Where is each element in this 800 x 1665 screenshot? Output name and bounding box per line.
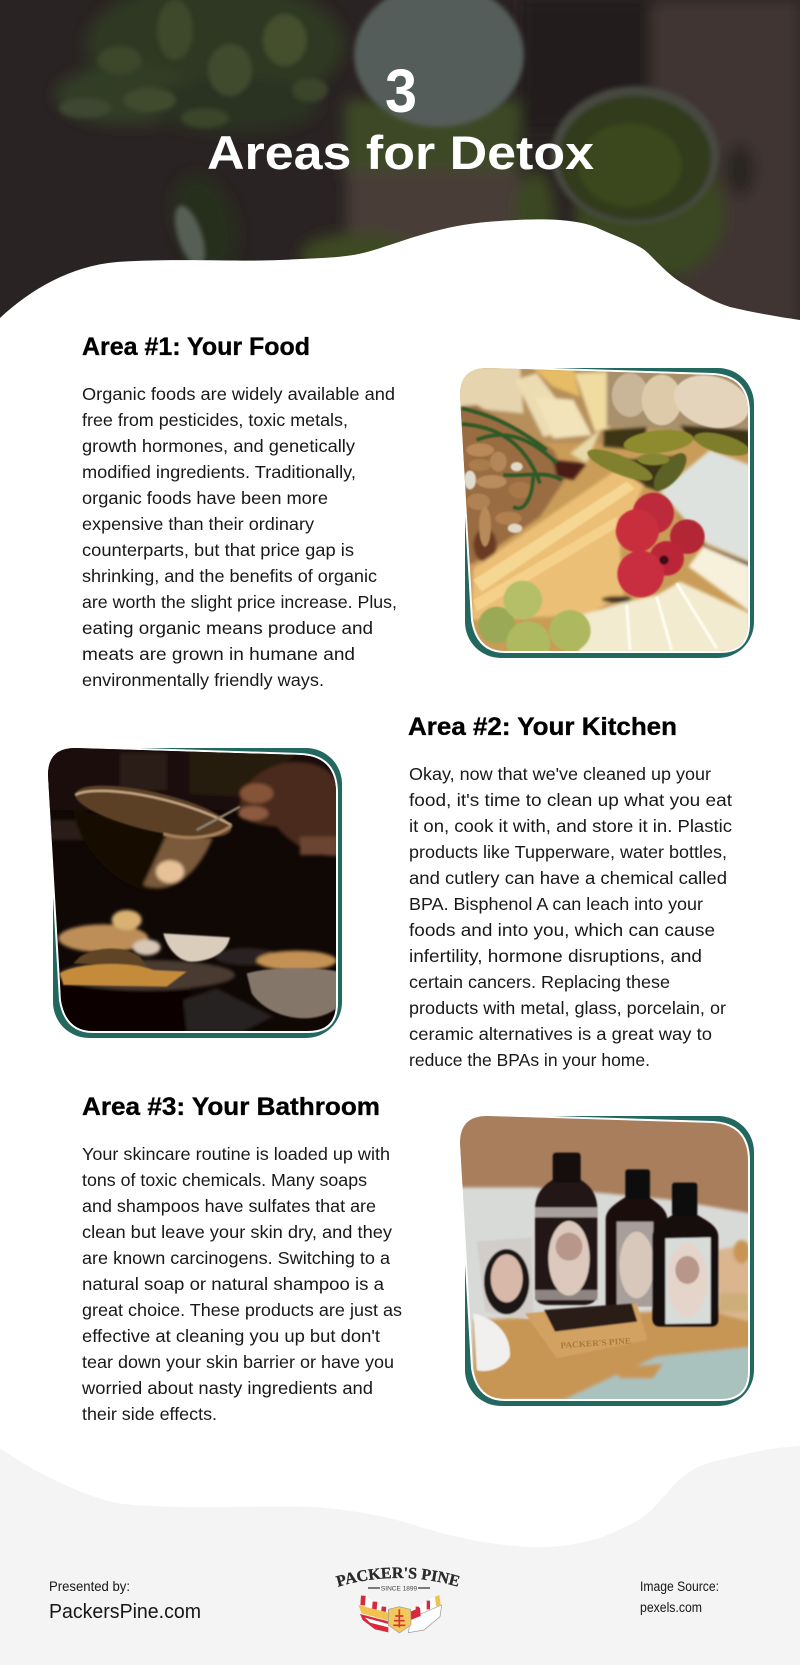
text block: area 2 body: it on, cook it with, and store it in. Plastic [409, 816, 732, 836]
soap box brand mark: PACKER'S PINE [560, 1335, 632, 1350]
text block: area 1 body: are worth the slight price increase. Plus, [82, 592, 397, 612]
text block: area 1 body: organic foods have been more [82, 488, 328, 508]
text block: area 2 body: foods and into you, which can cause [409, 920, 715, 940]
text block: area 2 body: products with metal, glass, porcelain, or [409, 998, 726, 1018]
panel: area 1 text [82, 333, 397, 690]
footer: presented by: Presented by: [49, 1578, 130, 1594]
footer: logo: SINCE 1899 [381, 1586, 417, 1592]
footer: image source: pexels.com [640, 1600, 702, 1615]
text block: area 2 body: products like Tupperware, water bottles, [409, 842, 727, 862]
text block: area 3 body: natural soap or natural shampoo is a [82, 1274, 384, 1294]
footer: presented by: PackersPine.com [49, 1601, 201, 1623]
heading: area 1: Area #1: Your Food [82, 333, 310, 361]
text block: area 2 body: ceramic alternatives is a great way to [409, 1024, 712, 1044]
panel: area 2 text [408, 713, 732, 1070]
text block: area 1 body: eating organic means produce and [82, 618, 373, 638]
text block: area 2 body: Okay, now that we've cleaned up your [409, 764, 711, 784]
footer: logo: PACKER'S PINE [335, 1567, 460, 1587]
text block: area 3 body: and shampoos have sulfates that are [82, 1196, 376, 1216]
text block: area 1 body: counterparts, but that price gap is [82, 540, 354, 560]
header photo: detox drinks and greens [0, 0, 800, 330]
heading: area 3: Area #3: Your Bathroom [82, 1093, 380, 1121]
text block: area 3 body: their side effects. [82, 1404, 217, 1424]
text block: area 3 body: tear down your skin barrier or have you [82, 1352, 394, 1372]
text block: area 2 body [409, 764, 732, 1070]
text block: area 3 body: Your skincare routine is loaded up with [82, 1144, 390, 1164]
text block: area 3 body: effective at cleaning you up but don't [82, 1326, 380, 1346]
text block: area 1 body: expensive than their ordinary [82, 514, 314, 534]
text block: area 2 body: and cutlery can have a chemical called [409, 868, 727, 888]
text block: area 3 body: are known carcinogens. Switching to a [82, 1248, 390, 1268]
footer: logo [335, 1567, 460, 1634]
text block: area 1 body: growth hormones, and genetically [82, 436, 355, 456]
footer: image source [640, 1579, 719, 1615]
text block: area 1 body: shrinking, and the benefits of organic [82, 566, 377, 586]
text block: area 1 body: free from pesticides, toxic metals, [82, 410, 348, 430]
text block: area 1 body [82, 384, 397, 690]
photo frame: cheese board [460, 368, 754, 658]
text block: area 3 body: great choice. These products are just as [82, 1300, 402, 1320]
text block: area 2 body: reduce the BPAs in your home. [409, 1050, 650, 1070]
text block: area 1 body: meats are grown in humane and [82, 644, 355, 664]
photo frame: kitchen bowl [48, 748, 342, 1038]
text block: area 3 body: tons of toxic chemicals. Many soaps [82, 1170, 367, 1190]
footer: presented by [49, 1578, 201, 1623]
panel: area 3 text [81, 1093, 402, 1424]
text block: area 2 body: infertility, hormone disruptions, and [409, 946, 702, 966]
text block: area 1 body: modified ingredients. Traditionally, [82, 462, 356, 482]
text block: area 3 body: clean but leave your skin dry, and they [82, 1222, 392, 1242]
text block: area 3 body [81, 1144, 402, 1424]
title: 3 [385, 57, 417, 125]
text block: area 3 body: worried about nasty ingredients and [81, 1378, 373, 1398]
photo frame: pine tar bath products [460, 1116, 754, 1406]
text block: area 2 body: BPA. Bisphenol A can leach into your [409, 894, 703, 914]
text block: area 1 body: environmentally friendly ways. [82, 670, 324, 690]
white content wave [0, 219, 800, 1520]
text block: area 1 body: Organic foods are widely available and [82, 384, 395, 404]
heading: area 2: Area #2: Your Kitchen [408, 713, 677, 741]
title [207, 57, 594, 179]
text block: area 2 body: food, it's time to clean up what you eat [409, 790, 732, 810]
footer: image source: Image Source: [640, 1579, 719, 1594]
title: Areas for Detox [207, 126, 594, 179]
footer wave background [0, 1446, 800, 1665]
text block: area 2 body: certain cancers. Replacing these [409, 972, 670, 992]
